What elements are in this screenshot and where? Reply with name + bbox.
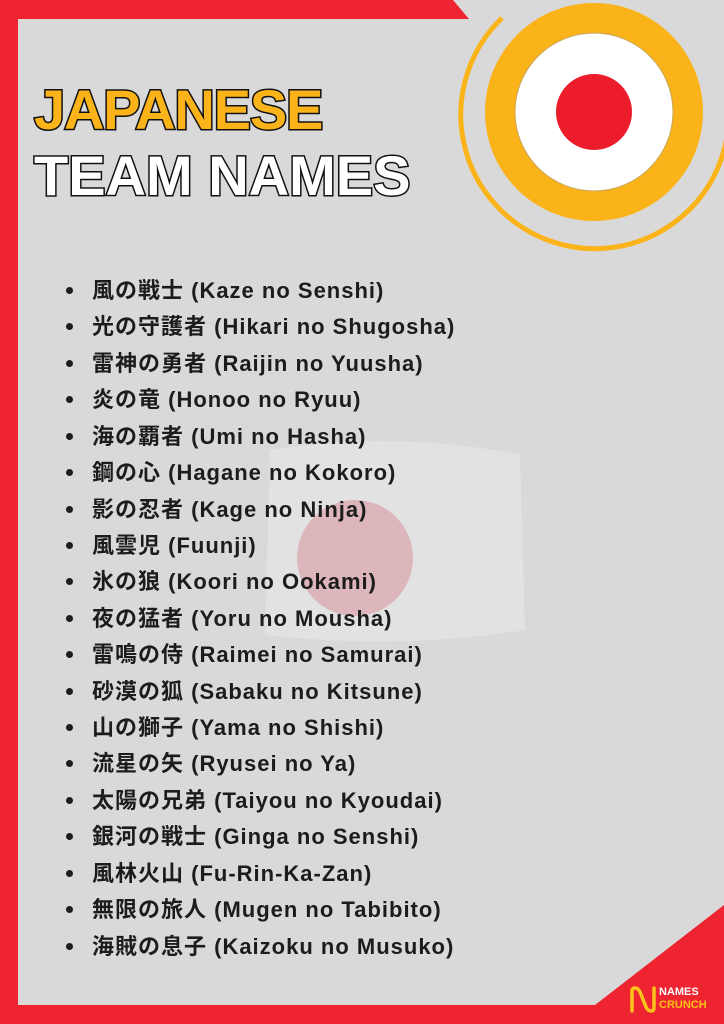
- list of names: 風林火山 (Fu-Rin-Ka-Zan): [92, 861, 372, 886]
- title: JAPANESE: [34, 78, 322, 141]
- list of names: 流星の矢 (Ryusei no Ya): [92, 751, 356, 776]
- list of names: 無限の旅人 (Mugen no Tabibito): [92, 897, 442, 922]
- title: TEAM NAMES: [34, 144, 410, 207]
- list of names: 夜の猛者 (Yoru no Mousha): [92, 606, 392, 631]
- logo: NAMES: [659, 986, 699, 998]
- list of names: 山の獅子 (Yama no Shishi): [92, 715, 384, 740]
- list of names: 太陽の兄弟 (Taiyou no Kyoudai): [92, 788, 443, 813]
- list of names: 影の忍者 (Kage no Ninja): [92, 497, 367, 522]
- list of names: 雷神の勇者 (Raijin no Yuusha): [92, 351, 424, 376]
- list of names: 海賊の息子 (Kaizoku no Musuko): [92, 934, 454, 959]
- list of names: 光の守護者 (Hikari no Shugosha): [92, 314, 455, 339]
- list of names: 鋼の心 (Hagane no Kokoro): [92, 460, 396, 485]
- list of names: 銀河の戦士 (Ginga no Senshi): [92, 824, 419, 849]
- title: [33, 78, 410, 207]
- list of names: [66, 278, 455, 959]
- list of names: 雷鳴の侍 (Raimei no Samurai): [92, 642, 423, 667]
- faded flag: [265, 441, 525, 641]
- list of names: 氷の狼 (Koori no Ookami): [92, 569, 377, 594]
- icon: japan flag circle: [461, 3, 724, 249]
- logo: [630, 986, 707, 1013]
- list of names: 砂漠の狐 (Sabaku no Kitsune): [92, 679, 423, 704]
- list of names: 炎の竜 (Honoo no Ryuu): [92, 387, 362, 412]
- list of names: 風雲児 (Fuunji): [92, 533, 257, 558]
- list of names: 海の覇者 (Umi no Hasha): [92, 424, 366, 449]
- logo: CRUNCH: [659, 999, 707, 1011]
- list of names: 風の戦士 (Kaze no Senshi): [92, 278, 384, 303]
